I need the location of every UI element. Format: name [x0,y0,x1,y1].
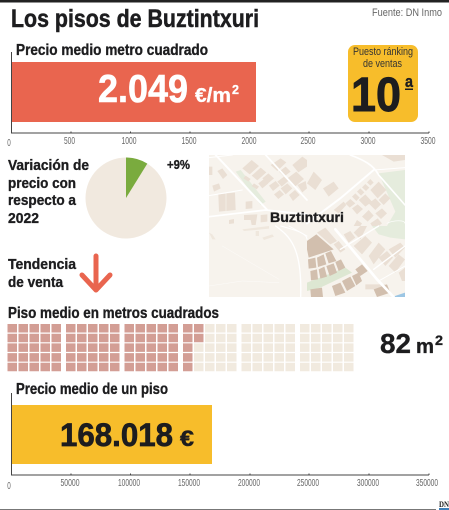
value: 82 m2: 82 [380,328,411,359]
text: price variation label: respecto a [8,192,77,209]
value: 82 m2: 2 [435,332,443,348]
text: sales trend label: de venta [8,274,64,291]
axis labels: 50000 [60,478,80,489]
axis labels: 350000 [416,478,438,489]
title: Los pisos de Buztintxuri [11,5,259,33]
panel: average flat price chart [7,381,438,492]
callout: sales ranking: a [405,72,413,91]
map: Buztintxuri [209,155,405,297]
text: price variation label: 2022 [8,210,39,227]
axis [12,52,429,133]
text: price variation label: Variación de [8,157,89,174]
axis labels: 500 [64,136,75,147]
axis labels: 150000 [178,478,200,489]
axis labels: 250000 [297,478,319,489]
text: sales trend label [8,256,77,291]
waffle chart: 82 of 150 squares [8,328,354,367]
unit: €: € [180,426,194,451]
callout: sales ranking: 10 [351,69,401,122]
text: price variation label: precio con [8,175,76,192]
value: 168.018: 168.018 [60,417,173,453]
axis labels: 3500 [420,136,436,147]
map label: Buztintxuri [270,210,344,225]
axis labels: 100000 [118,478,140,489]
axis labels: 1500 [182,136,197,147]
axis [12,393,429,475]
value: 82 m2: m [416,336,434,358]
axis labels [7,136,436,149]
text: price variation label [8,157,89,227]
axis labels: 0 [7,481,11,492]
callout: sales ranking: Puesto ránking [353,46,413,58]
heading: average flat price: Precio medio de un piso [16,381,168,398]
axis labels [7,478,438,492]
heading: price per square metre: Precio medio metro cuadrado [16,42,208,59]
axis labels: 1000 [122,136,137,147]
unit: €/m2 [195,82,239,107]
bar: 2049 [11,62,256,122]
axis labels: 2500 [300,136,316,147]
pie chart: +9% [86,158,166,238]
axis labels: 3000 [360,136,376,147]
axis labels: 2000 [242,136,257,147]
axis labels: 300000 [357,478,379,489]
heading: average flat size: Piso medio en metros cuadrados [8,305,219,322]
axis labels: 200000 [238,478,260,489]
callout: sales ranking: de ventas [363,58,402,70]
value: 82 m2 [380,328,443,359]
callout: sales ranking [348,45,418,122]
bar: 168018 [11,405,212,464]
unit: €/m2: 2 [232,82,239,97]
value: 2.049: 2.049 [98,68,188,111]
unit: €/m2: €/m [195,85,231,107]
text: sales trend label: Tendencia [8,256,77,273]
panel: price per square metre chart [7,42,436,149]
label: +9%: +9% [167,157,190,172]
axis labels: 0 [7,138,11,149]
arrow: downward trend [82,256,110,290]
